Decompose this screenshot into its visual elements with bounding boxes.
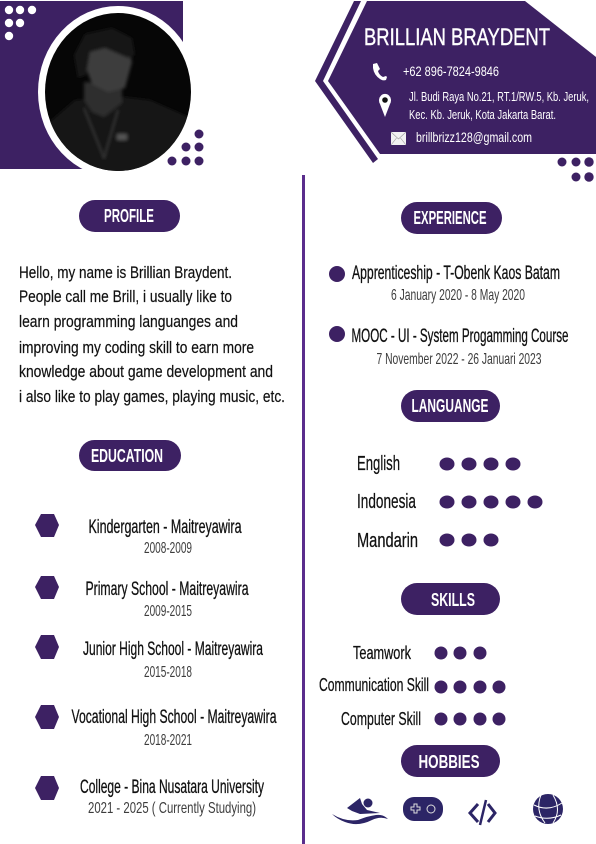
profile text [19, 263, 285, 406]
profile text: i also like to play games, playing music, etc. [19, 387, 285, 406]
language: mandarin [357, 530, 498, 552]
address [409, 89, 589, 122]
icon: game controller [403, 797, 443, 821]
education: kindergarten: 2008-2009 [144, 540, 192, 557]
heading: hobbies [401, 745, 500, 777]
phone number: +62 896-7824-9846 [403, 63, 499, 79]
education: primary [35, 576, 249, 620]
education: junior high [35, 635, 263, 681]
heading: education [79, 440, 181, 471]
heading: profile [79, 200, 180, 232]
heading: hobbies: HOBBIES [418, 752, 480, 772]
education: primary: Primary School - Maitreyawira [86, 579, 249, 600]
language: english [357, 453, 520, 475]
profile text: improving my coding skill to earn more [19, 338, 254, 357]
education: college [35, 776, 264, 817]
experience: apprenticeship [329, 263, 560, 304]
profile photo [40, 10, 195, 175]
dots top right [558, 157, 594, 182]
heading: skills [401, 583, 500, 615]
icon: swimming [332, 798, 388, 824]
white dots [5, 6, 36, 40]
skill: computer: Computer Skill [341, 709, 421, 729]
heading: experience: EXPERIENCE [414, 208, 486, 228]
profile text: Hello, my name is Brillian Braydent. [19, 263, 232, 282]
panel: contact header [315, 1, 596, 163]
heading: skills: SKILLS [431, 590, 475, 610]
skill: communication: Communication Skill [319, 675, 429, 695]
education: primary: 2009-2015 [144, 603, 192, 620]
experience: mooc [329, 326, 568, 368]
panel: photo header [0, 1, 198, 178]
heading: languange [401, 390, 500, 422]
email: brillbrizz128@gmail.com [416, 129, 532, 145]
education: college: 2021 - 2025 ( Currently Studying) [88, 800, 256, 817]
white ring [38, 6, 198, 178]
chevron stripe [315, 1, 378, 163]
language: mandarin: Mandarin [357, 530, 418, 552]
heading: languange: LANGUANGE [412, 396, 488, 416]
profile text: learn programming languanges and [19, 312, 238, 331]
icon: code [470, 800, 495, 825]
language: indonesia: Indonesia [357, 491, 417, 513]
education: vocational: 2018-2021 [144, 732, 192, 749]
education: junior high: 2015-2018 [144, 664, 192, 681]
heading: education: EDUCATION [91, 446, 163, 466]
icon: phone [373, 63, 387, 80]
profile text: knowledge about game development and [19, 362, 273, 381]
profile text: People call me Brill, i usually like to [19, 287, 232, 306]
education: college: College - Bina Nusatara University [80, 777, 264, 798]
purple dots near photo [168, 130, 204, 166]
education: kindergarten [35, 514, 242, 557]
language: english: English [357, 453, 400, 475]
skill: teamwork [353, 643, 486, 663]
icon: location pin [379, 94, 391, 117]
icon: globe [533, 794, 563, 824]
icon: mail [391, 132, 406, 145]
education: vocational [35, 705, 277, 749]
education: kindergarten: Kindergarten - Maitreyawira [88, 517, 242, 538]
heading: profile: PROFILE [104, 206, 154, 226]
experience: apprenticeship: 6 January 2020 - 8 May 2020 [391, 287, 525, 304]
education: junior high: Junior High School - Maitreyawira [83, 639, 263, 660]
language: indonesia [357, 491, 542, 513]
skill: teamwork: Teamwork [353, 643, 412, 663]
heading: experience [401, 202, 502, 234]
education: vocational: Vocational High School - Maitreyawira [72, 707, 277, 728]
